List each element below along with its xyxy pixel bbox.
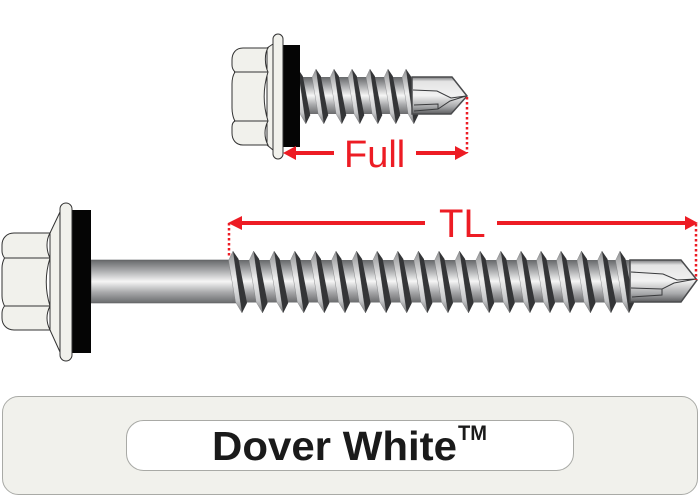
- dimension: Full length: [283, 97, 468, 176]
- Full right arrow: [416, 146, 468, 160]
- colour name panel: [2, 396, 698, 494]
- trademark mark: TM: [458, 422, 487, 445]
- large screw hex head: [2, 203, 72, 361]
- small screw drill tip: [412, 77, 467, 114]
- large screw threaded shaft: [232, 260, 630, 302]
- inner label pill: [126, 420, 574, 470]
- small screw threaded shaft: [300, 77, 413, 114]
- TL label: TL: [439, 202, 486, 246]
- large screw: self-drilling fastener, long: [2, 203, 697, 361]
- colour name text: Dover White: [212, 423, 457, 469]
- TL right dotted extension line: [695, 224, 697, 280]
- large screw threads: [228, 251, 634, 313]
- small screw black washer: [283, 45, 300, 147]
- small screw threads: [294, 69, 418, 124]
- Full left arrow: [283, 146, 334, 160]
- TL right arrow: [497, 216, 698, 230]
- large screw drill tip: [630, 260, 697, 302]
- large screw plain shank: [91, 260, 236, 303]
- small screw: self-drilling fastener, short: [232, 34, 467, 159]
- outer panel: [2, 396, 698, 494]
- Full dotted extension line: [466, 97, 468, 153]
- dimension: TL thread length: [228, 202, 698, 280]
- TL left dotted extension line: [228, 223, 230, 258]
- Full label: Full: [344, 134, 405, 176]
- small screw hex head: [232, 34, 283, 159]
- large screw black washer: [72, 210, 91, 353]
- TL left arrow: [228, 216, 425, 230]
